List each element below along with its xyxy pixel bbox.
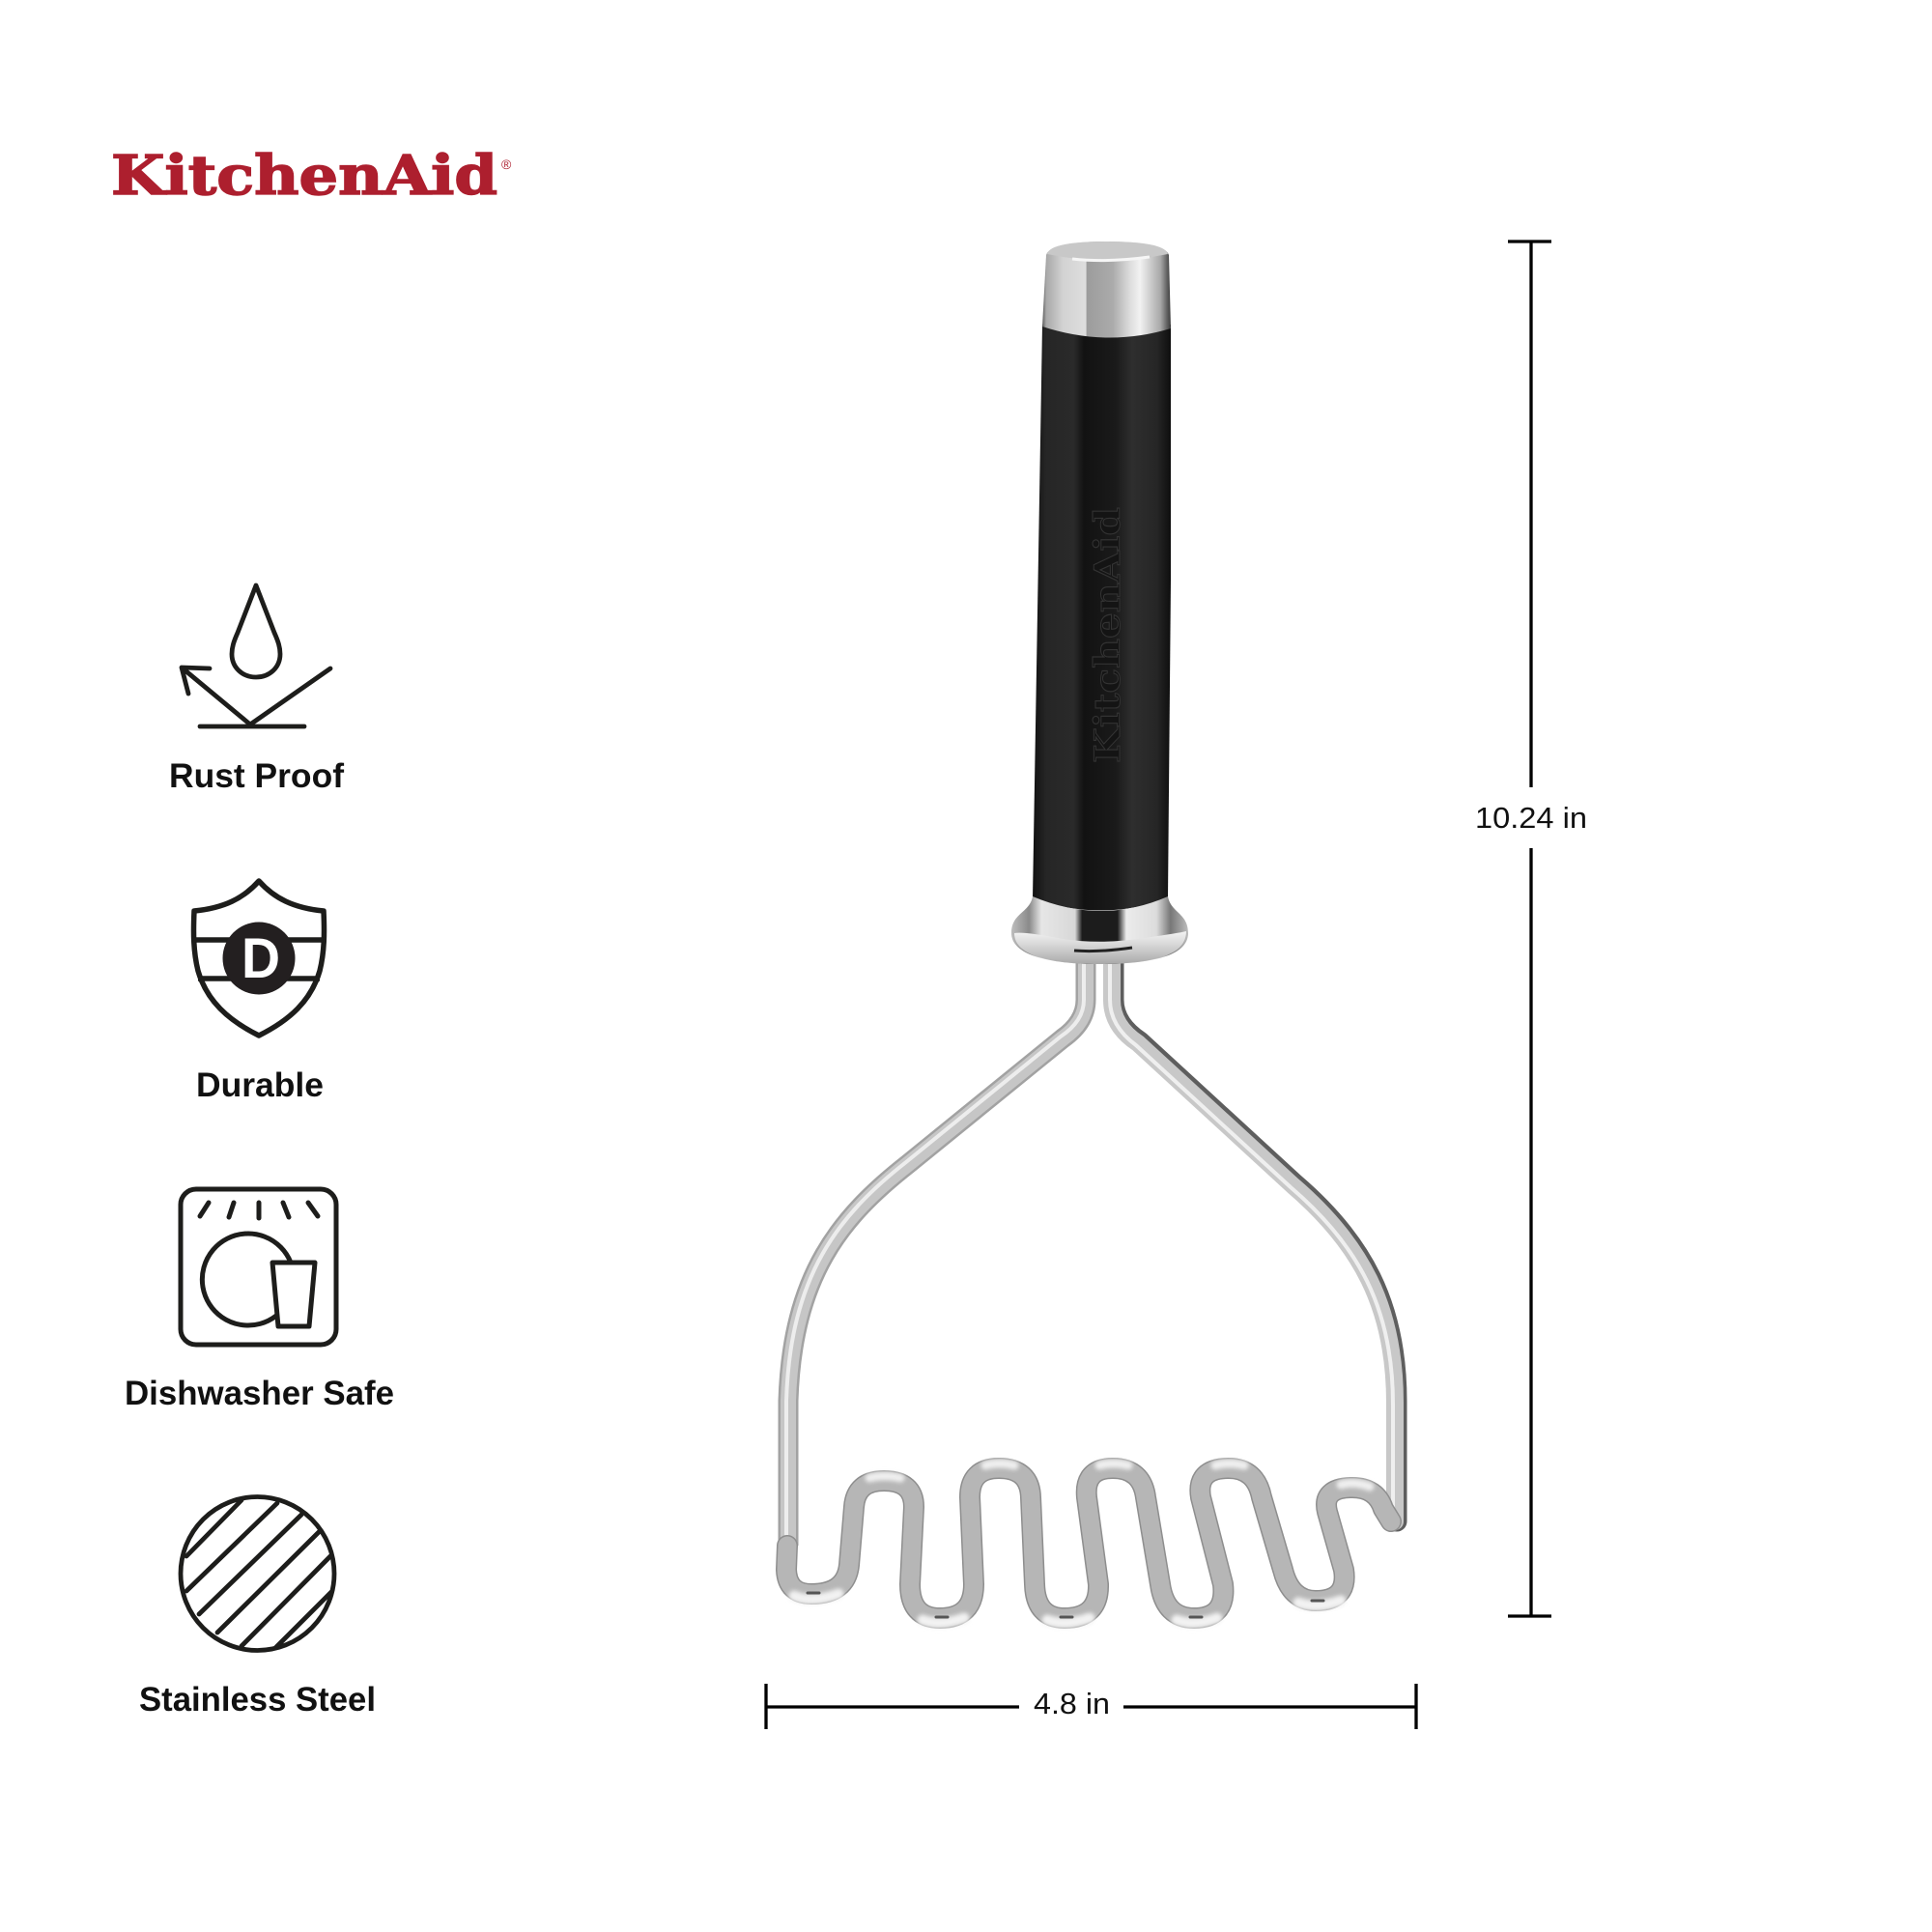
masher left arm wire bbox=[786, 956, 1086, 1546]
dimension: width 4.8 in bbox=[766, 1684, 1416, 1729]
handle: chrome collar bbox=[1011, 896, 1188, 964]
embossed brand text on grip: KitchenAid bbox=[1088, 507, 1128, 763]
icon: water drop bouncing off surface bbox=[182, 585, 330, 726]
dimension: width 4.8 in: 4.8 in bbox=[1034, 1687, 1110, 1720]
label: Rust Proof: Rust Proof bbox=[169, 757, 344, 795]
masher zigzag head bbox=[786, 1463, 1391, 1623]
feature: durable bbox=[193, 881, 325, 1104]
dimension: height 10.24 in: 10.24 in bbox=[1475, 801, 1587, 835]
dimension: height 10.24 in bbox=[1475, 242, 1587, 1616]
brand logo: KitchenAid: ® bbox=[501, 156, 512, 172]
label: Durable: Durable bbox=[196, 1066, 324, 1104]
icon: shield with D: D bbox=[242, 927, 280, 990]
feature: stainless steel bbox=[139, 1497, 376, 1719]
brand logo: KitchenAid: KitchenAid bbox=[111, 144, 497, 208]
handle: black grip bbox=[1033, 325, 1171, 910]
icon: hatched circle bbox=[181, 1497, 334, 1650]
label: Dishwasher Safe: Dishwasher Safe bbox=[125, 1375, 394, 1412]
icon: dishwasher with plate and cup bbox=[181, 1189, 336, 1345]
label: Stainless Steel: Stainless Steel bbox=[139, 1681, 376, 1719]
feature: rust proof bbox=[169, 585, 344, 795]
handle: steel end cap bbox=[1042, 242, 1171, 338]
feature: dishwasher safe bbox=[125, 1189, 394, 1412]
icon: shield with D bbox=[193, 881, 325, 1036]
product: potato masher bbox=[786, 242, 1397, 1623]
masher right arm wire bbox=[1110, 956, 1397, 1521]
